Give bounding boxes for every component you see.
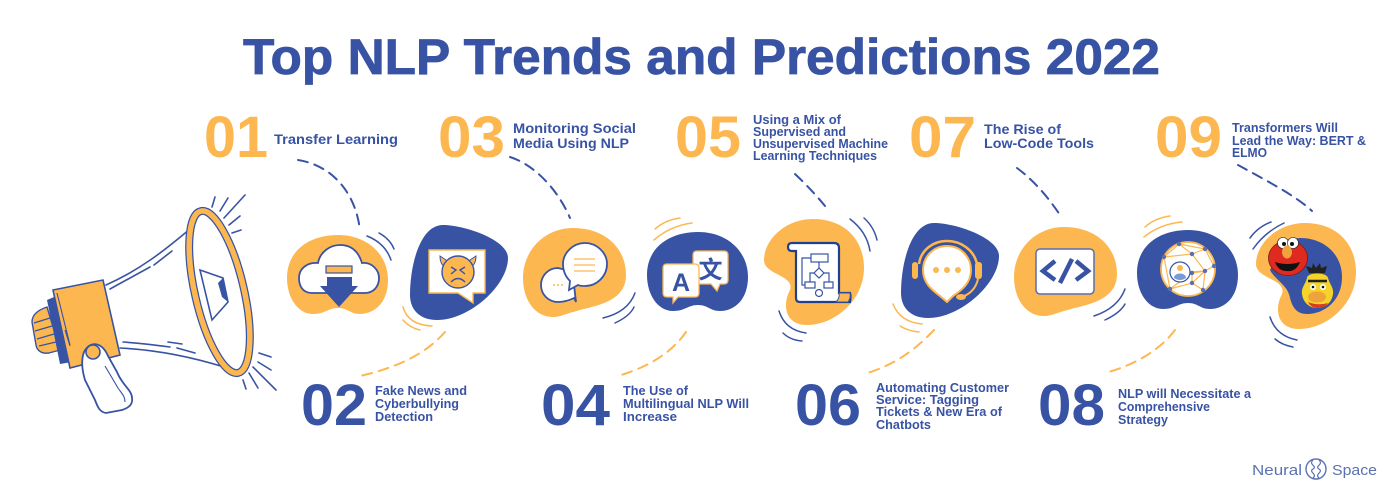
item 05: Unsupervised Machine bbox=[753, 136, 888, 151]
blob 3: chat bubbles icon bbox=[523, 228, 626, 317]
item 09: ELMO bbox=[1232, 145, 1267, 160]
item 01: 01 bbox=[204, 105, 268, 170]
blob 2: angry devil speech bubble icon bbox=[410, 225, 508, 320]
blob 5: flowchart scroll icon bbox=[764, 219, 864, 325]
item 02: Detection bbox=[375, 409, 433, 424]
item 03 bbox=[438, 105, 636, 170]
item 04: 04 bbox=[541, 373, 610, 438]
title: Top NLP Trends and Predictions 2022 bbox=[243, 29, 1160, 85]
item 08: NLP will Necessitate a bbox=[1118, 386, 1252, 401]
blob 7: code tag icon bbox=[1014, 227, 1117, 316]
megaphone body bbox=[53, 280, 120, 368]
swoosh accents blue bbox=[367, 218, 1297, 347]
item 09 bbox=[1155, 105, 1366, 170]
item 07: The Rise of bbox=[984, 121, 1061, 137]
item 09: Lead the Way: BERT & bbox=[1232, 133, 1366, 148]
item 06 bbox=[795, 373, 1009, 438]
item 02: Cyberbullying bbox=[375, 396, 459, 411]
item 01 bbox=[204, 105, 398, 170]
blob 4: translation icon: 文 bbox=[698, 256, 722, 284]
megaphone ring bbox=[177, 206, 262, 378]
swoosh accents orange bbox=[403, 216, 1182, 332]
item 05: 05 bbox=[675, 105, 741, 170]
item 05 bbox=[675, 105, 888, 170]
blob 6: headset chat icon bbox=[901, 223, 999, 318]
item 04 bbox=[541, 373, 749, 438]
item 05: Learning Techniques bbox=[753, 148, 877, 163]
megaphone handle bbox=[82, 344, 132, 413]
item 03: Monitoring Social bbox=[513, 120, 636, 136]
item 04: Multilingual NLP Will bbox=[623, 396, 749, 411]
logo: Neural Space: Space bbox=[1332, 462, 1377, 479]
logo: Neural Space: Neural bbox=[1252, 462, 1302, 479]
megaphone horn bbox=[106, 229, 224, 367]
logo: Neural Space bbox=[1252, 459, 1377, 479]
item 03: Media Using NLP bbox=[513, 135, 629, 151]
megaphone illustration bbox=[32, 195, 276, 413]
item 07 bbox=[909, 105, 1094, 170]
item 02: 02 bbox=[301, 373, 367, 438]
megaphone rays bbox=[212, 195, 276, 390]
megaphone back plate bbox=[47, 297, 72, 364]
item 05: Supervised and bbox=[753, 124, 846, 139]
item 06: Service: Tagging bbox=[876, 392, 979, 407]
item 04: The Use of bbox=[623, 383, 689, 398]
item 01: Transfer Learning bbox=[274, 131, 398, 147]
item 07: Low-Code Tools bbox=[984, 135, 1094, 151]
item 04: Increase bbox=[623, 409, 677, 424]
item 05: Using a Mix of bbox=[753, 112, 842, 127]
blob 8: network person icon bbox=[1137, 230, 1238, 309]
dashed connectors top bbox=[298, 157, 1312, 230]
item 06: Tickets & New Era of bbox=[876, 404, 1003, 419]
item 06: Automating Customer bbox=[876, 380, 1009, 395]
item 07: 07 bbox=[909, 105, 976, 170]
blob 4: translation icon bbox=[647, 232, 748, 311]
item 02: Fake News and bbox=[375, 383, 467, 398]
item 02 bbox=[301, 373, 467, 438]
item 03: 03 bbox=[438, 105, 505, 170]
item 08: 08 bbox=[1038, 373, 1105, 438]
item 08: Comprehensive bbox=[1118, 399, 1210, 414]
blob 1: cloud download icon bbox=[287, 235, 388, 314]
blob 9: Elmo and Bert icon bbox=[1256, 223, 1356, 329]
item 09: Transformers Will bbox=[1232, 120, 1338, 135]
blob 4: translation icon: A bbox=[672, 269, 690, 297]
item 08 bbox=[1038, 373, 1252, 438]
item 06: Chatbots bbox=[876, 417, 931, 432]
megaphone knob bbox=[32, 307, 60, 353]
megaphone speaker cone bbox=[200, 270, 228, 320]
item 06: 06 bbox=[795, 373, 861, 438]
item 09: 09 bbox=[1155, 105, 1222, 170]
item 08: Strategy bbox=[1118, 412, 1169, 427]
dashed connectors bottom bbox=[360, 330, 1175, 376]
